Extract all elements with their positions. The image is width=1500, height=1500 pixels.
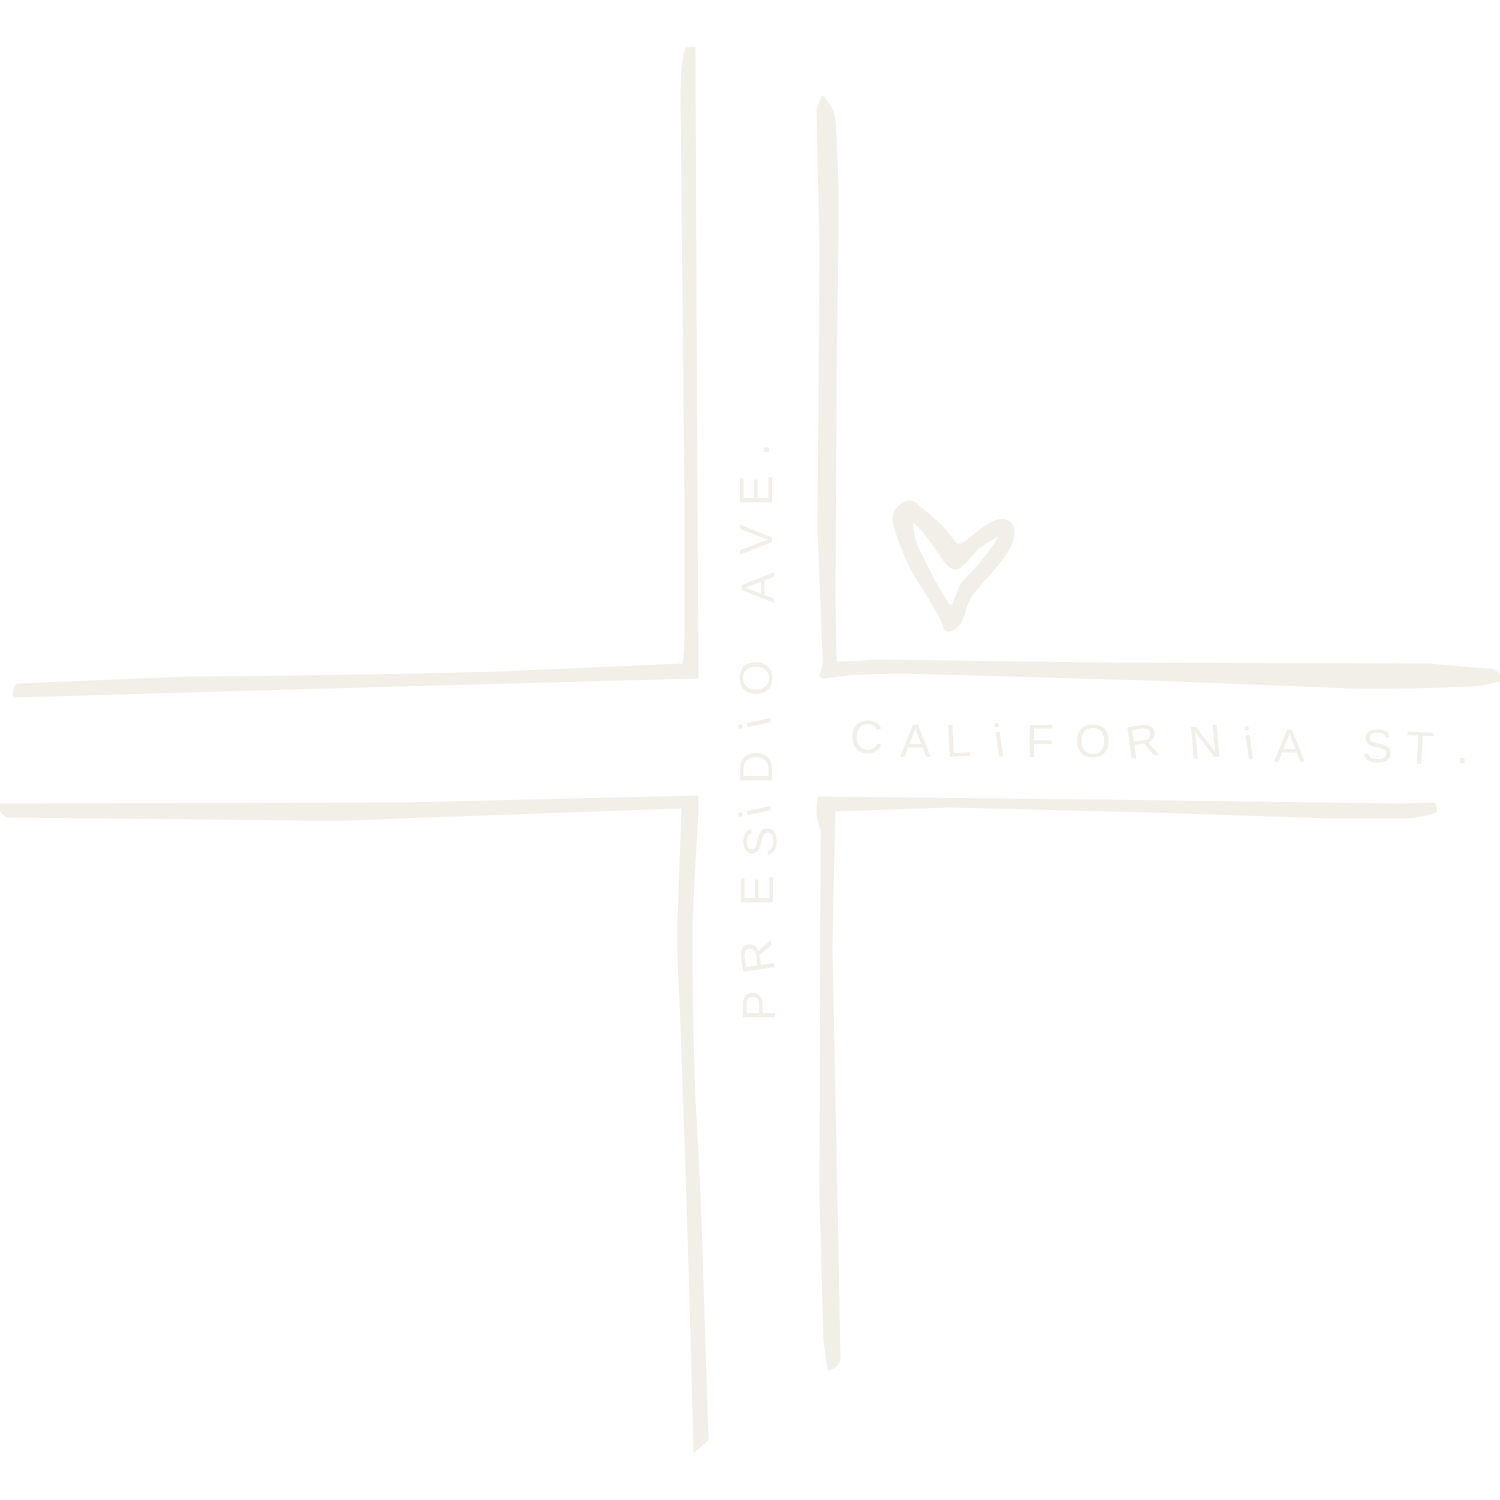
street edge: top-left corner bbox=[13, 47, 698, 697]
street edge: bottom-right corner bbox=[817, 797, 1436, 1370]
street label: Presidio Ave.: PRESiDiO AVE. bbox=[727, 443, 786, 1021]
street edge: top-right corner bbox=[817, 96, 1500, 688]
icon: heart bbox=[894, 502, 1013, 630]
street label: California St.: CALiFORNiA ST. bbox=[850, 711, 1469, 774]
street edge: bottom-left corner bbox=[0, 796, 708, 1452]
